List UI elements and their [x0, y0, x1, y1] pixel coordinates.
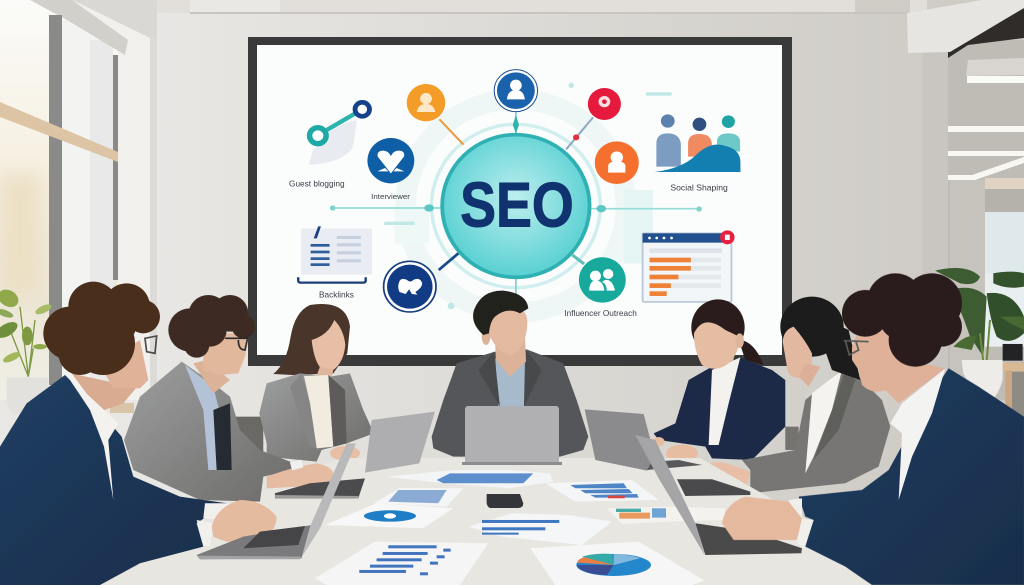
plant on the left — [0, 286, 53, 414]
icon: blue person — [494, 70, 538, 133]
label: backlinks: Backlinks — [319, 290, 354, 299]
laptop: center — [462, 406, 562, 465]
icon: red location badge — [566, 88, 621, 149]
icon: blue heart badge — [367, 138, 414, 183]
person: woman in grey jacket back left — [233, 304, 374, 462]
label: guest blogging: Guest blogging — [289, 180, 345, 189]
icon: orange person — [407, 84, 464, 145]
icon: teal people badge — [572, 255, 626, 303]
laptop: front right — [635, 435, 802, 555]
laptop: back right — [585, 409, 702, 471]
document: sheet with small bars — [373, 488, 463, 507]
person: front right man in navy jacket — [722, 273, 1024, 585]
person: man in grey suit center — [432, 291, 588, 457]
document: chart sheet far center — [387, 470, 553, 488]
SEO hub circle: SEO — [460, 169, 574, 240]
document: colored card — [607, 507, 725, 524]
icon: orange person right — [595, 141, 639, 184]
person: woman in navy back right — [653, 299, 785, 462]
person: woman with grey jacket right — [699, 297, 890, 493]
document: sheet center — [469, 513, 612, 545]
conference table — [100, 458, 905, 585]
document: bar chart front left — [315, 542, 488, 585]
pale rings behind SEO — [395, 99, 653, 313]
label: interviewer: Interviewer — [371, 192, 410, 201]
decoration marks — [384, 83, 672, 309]
wall-mounted presentation screen — [248, 37, 792, 366]
person: front left man in navy jacket — [0, 282, 277, 585]
phone — [487, 494, 523, 508]
icon: navy hands badge — [384, 253, 458, 312]
icon: guest blogging chain — [309, 102, 370, 165]
icon: backlinks document — [298, 226, 372, 283]
laptop: front left — [197, 443, 356, 559]
icon: social people group — [654, 114, 740, 172]
papers on the table — [315, 470, 725, 585]
document: sheet with bars center right — [545, 480, 659, 502]
SEO hub circle — [442, 135, 590, 277]
document: pie chart sheet — [530, 542, 705, 585]
laptop: back left — [275, 412, 435, 499]
person: man with curly hair in grey jacket — [124, 295, 334, 502]
label: influencer outreach: Influencer Outreach — [564, 309, 637, 318]
icon: browser window bar chart — [643, 230, 735, 302]
document: sheet with blue oval — [325, 503, 453, 528]
laptop: right middle — [677, 479, 750, 496]
connector lines — [330, 112, 702, 303]
plant on the right — [935, 268, 1024, 421]
label: social shaping: Social Shaping — [670, 183, 728, 193]
window on the left — [0, 0, 157, 413]
